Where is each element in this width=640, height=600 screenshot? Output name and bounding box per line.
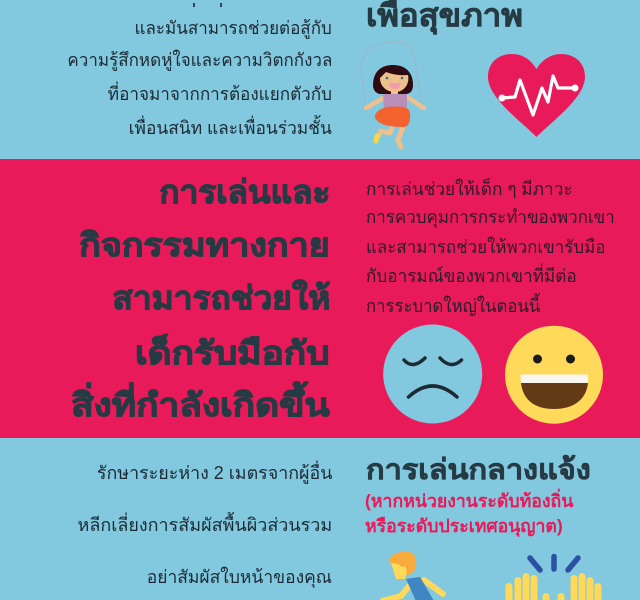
icon: high five hands: [506, 554, 602, 600]
text block: play explanation: และสามารถช่วยให้พวกเขารับมือ: [366, 237, 605, 257]
icon: happy face: [505, 326, 603, 424]
icon: sad face: [383, 324, 482, 424]
subheading: permission note: (หากหน่วยงานระดับท้องถิ่น: [365, 491, 573, 511]
text block: mental health benefits: เพื่อนสนิท และเพื่อนร่วมชั้น: [129, 118, 332, 138]
subheading: permission note: [365, 488, 574, 537]
icon: running boy: [380, 552, 446, 600]
heading: play and physical activity help children cope: เด็กรับมือกับ: [135, 335, 330, 371]
text block: play explanation: การควบคุมการกระทำของพวกเขา: [366, 207, 615, 227]
icon: heart with pulse line: [488, 54, 585, 137]
subheading: permission note: หรือระดับประเทศอนุญาต): [365, 516, 563, 536]
icon: girl jumping rope: [360, 42, 426, 150]
text block: mental health benefits: และมันสามารถช่วยต่อสู้กับ: [135, 18, 332, 38]
text block: safety rules: หลีกเลี่ยงการสัมผัสพื้นผิวส่วนรวม: [77, 515, 332, 535]
heading: play and physical activity help children cope: กิจกรรมทางกาย: [79, 227, 330, 263]
heading: play and physical activity help children cope: [71, 174, 330, 423]
text block: play explanation: การเล่นช่วยให้เด็ก ๆ มีภาวะ: [366, 179, 573, 199]
text block: mental health benefits: ความรู้สึกหดหู่ใจและความวิตกกังวล: [67, 50, 332, 70]
text block: mental health benefits: ที่อาจมาจากการต้องแยกตัวกับ: [108, 84, 332, 104]
panel: top health section: [0, 0, 640, 159]
text block: mental health benefits: [67, 18, 332, 138]
text block: safety rules: [77, 460, 332, 588]
heading: outdoor play: การเล่นกลางแจ้ง: [366, 454, 591, 485]
text block: safety rules: รักษาระยะห่าง 2 เมตรจากผู้อื่น: [96, 463, 332, 483]
text block: play explanation: กับอารมณ์ของพวกเขาที่มีต่อ: [366, 266, 577, 286]
clipped text fragment at top edge: [193, 3, 222, 7]
text block: safety rules: อย่าสัมผัสใบหน้าของคุณ: [147, 567, 332, 587]
heading: play and physical activity help children cope: สามารถช่วยให้: [112, 280, 330, 316]
heading: play and physical activity help children cope: สิ่งที่กำลังเกิดขึ้น: [71, 387, 330, 423]
text block: play explanation: การระบาดใหญ่ในตอนนี้: [366, 296, 540, 316]
panel: outdoor play section: [0, 438, 640, 600]
text block: play explanation: [366, 178, 615, 316]
panel: coping section: [0, 159, 640, 438]
heading: play and physical activity help children cope: การเล่นและ: [159, 174, 330, 210]
